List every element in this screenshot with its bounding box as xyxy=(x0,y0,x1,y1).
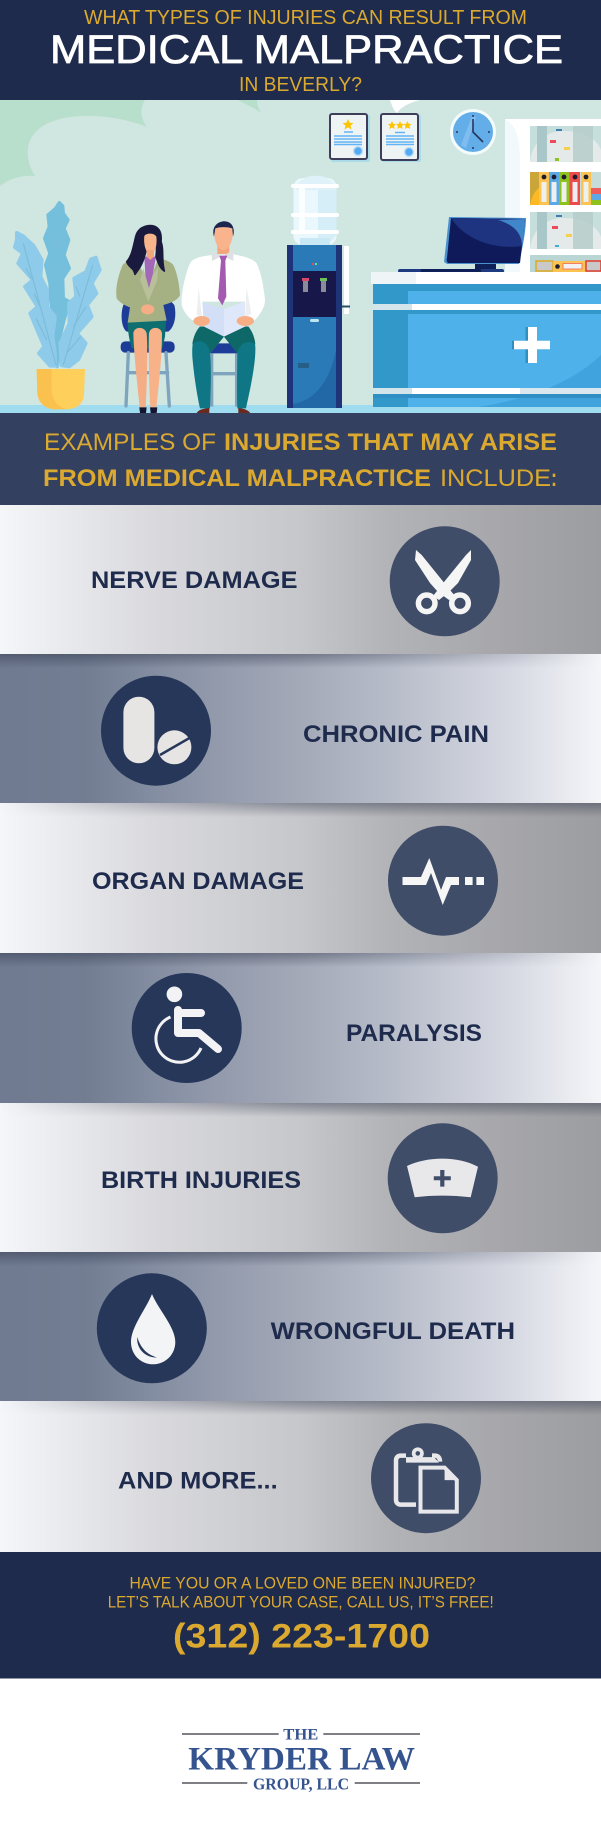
intro band: FROM MEDICAL MALPRACTICE xyxy=(43,465,431,492)
illustration: waiting room xyxy=(0,100,601,414)
intro band: EXAMPLES OF xyxy=(44,429,216,456)
row: organ damage: ORGAN DAMAGE xyxy=(92,868,304,895)
white wall accent xyxy=(390,100,420,113)
reception counter xyxy=(371,272,601,407)
plus sign xyxy=(512,327,528,363)
intro band: : xyxy=(551,465,557,492)
row: birth injuries: BIRTH INJURIES xyxy=(101,1167,301,1194)
shelf row 3 xyxy=(530,212,601,249)
icon: clipboard xyxy=(371,1423,481,1533)
row: wrongful death: WRONGFUL DEATH xyxy=(271,1318,515,1345)
icon: nurse hat xyxy=(388,1123,498,1233)
logo: KRYDER LAW xyxy=(188,1741,415,1777)
wall clock xyxy=(450,109,496,155)
icon: drop xyxy=(97,1273,207,1383)
row: nerve damage xyxy=(0,505,601,654)
row: paralysis xyxy=(0,953,601,1103)
background green cloud xyxy=(0,100,261,186)
shelves with binders xyxy=(505,119,601,272)
logo xyxy=(182,1726,420,1793)
header line 3: IN BEVERLY? xyxy=(239,74,362,96)
row: and more: AND MORE... xyxy=(118,1468,278,1495)
icon: pills xyxy=(101,676,211,786)
row: chronic pain xyxy=(0,654,601,803)
row: paralysis: PARALYSIS xyxy=(346,1020,482,1047)
shelf row 1 xyxy=(530,126,601,162)
row: chronic pain: CHRONIC PAIN xyxy=(303,721,489,748)
header banner xyxy=(0,0,601,100)
certificate 2 xyxy=(381,114,421,162)
header line 1: WHAT TYPES OF INJURIES CAN RESULT FROM xyxy=(84,7,527,29)
pot xyxy=(37,369,85,409)
icon: scissors xyxy=(390,526,500,636)
row: nerve damage: NERVE DAMAGE xyxy=(91,567,298,594)
phone number: (312) 223-1700 xyxy=(173,1618,430,1656)
logo: GROUP, LLC xyxy=(253,1774,349,1793)
intro band: INJURIES THAT MAY ARISE xyxy=(224,429,557,456)
shelf row 4 xyxy=(530,255,601,272)
computer monitor xyxy=(398,217,526,273)
logo: THE xyxy=(283,1726,318,1743)
footer call to action: LET’S TALK ABOUT YOUR CASE, CALL US, IT’S FREE! xyxy=(108,1593,494,1612)
row: and more xyxy=(0,1401,601,1552)
shelf row 2 binders xyxy=(530,172,601,205)
row: organ damage xyxy=(0,803,601,953)
footer call to action: HAVE YOU OR A LOVED ONE BEEN INJURED? xyxy=(130,1573,476,1592)
intro band xyxy=(0,413,601,506)
certificate 1 xyxy=(330,114,370,162)
icon: heartbeat xyxy=(388,826,498,936)
icon: wheelchair xyxy=(132,973,242,1083)
water cooler xyxy=(287,176,350,408)
man reading xyxy=(182,221,265,414)
main title: MEDICAL MALPRACTICE xyxy=(50,28,563,72)
woman on chair xyxy=(116,226,180,413)
floor xyxy=(0,405,601,413)
plant xyxy=(15,203,100,409)
row: wrongful death xyxy=(0,1252,601,1401)
row: birth injuries xyxy=(0,1103,601,1252)
footer call to action xyxy=(0,1552,601,1678)
intro band: INCLUDE xyxy=(440,465,551,492)
